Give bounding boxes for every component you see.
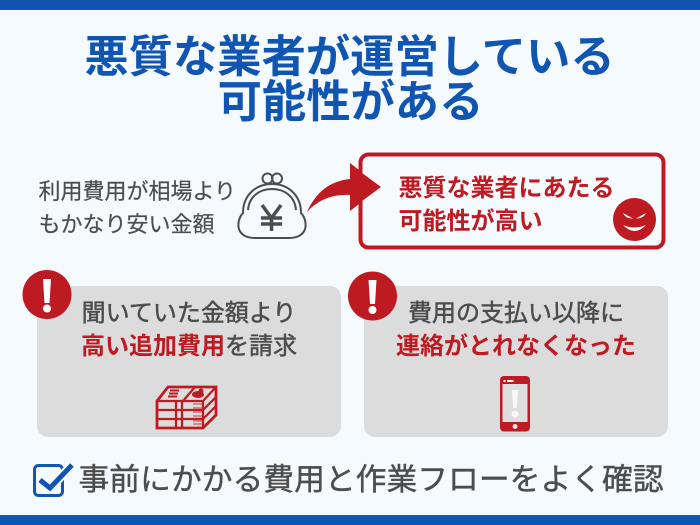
text: cost description [38,179,236,237]
icon: blue checkbox [34,465,72,496]
icon: exclamation badge [348,272,397,320]
top bar [0,0,700,10]
panel: warning callout [358,154,664,248]
panel: lost contact [348,272,668,437]
title: 可能性がある [218,78,483,127]
title [84,33,615,127]
title: 悪質な業者が運営している [84,33,615,82]
text: cost description: もかなり安い金額 [38,212,215,237]
panel text: 費用の支払い以降に [408,300,624,327]
panel text [81,300,297,360]
bottom bar [0,515,700,525]
callout text: 悪質な業者にあたる [398,175,614,202]
footer text: 事前にかかる費用と作業フローをよく確認 [78,462,664,497]
panel text: 聞いていた金額より [82,300,296,327]
text: cost description: 利用費用が相場より [38,179,236,204]
icon: exclamation badge [22,270,72,319]
arrow [307,163,381,212]
panel: additional charges [22,270,341,437]
panel text: 高い追加費用を請求 [81,333,297,360]
icon: devil face [613,198,656,241]
callout text: 可能性が高い [398,207,542,235]
panel text: 連絡がとれなくなった [396,332,636,360]
icon: smartphone with alert [500,376,530,432]
icon: coin purse with yen [238,174,306,238]
callout text [398,175,614,235]
panel text [396,300,636,360]
arrow tip [358,170,381,204]
icon: stack of banknotes [157,387,216,428]
